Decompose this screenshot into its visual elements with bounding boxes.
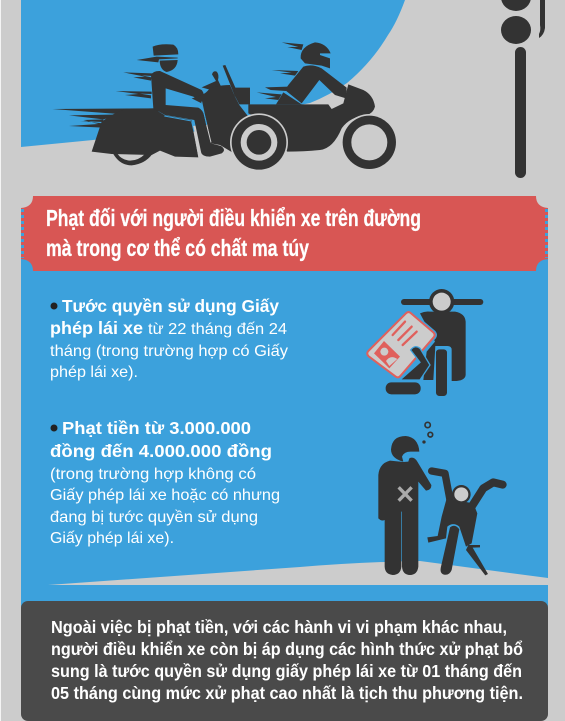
rear half of motorcycle and rider <box>52 44 224 165</box>
background: blue sky shape <box>21 0 405 147</box>
heading text <box>46 205 421 261</box>
engine block <box>192 85 272 155</box>
icon: intoxicated figures <box>378 422 503 575</box>
icon: traffic light <box>501 0 545 178</box>
rear rider torso and leg <box>151 71 224 157</box>
text block: note: Ngoài việc bị phạt tiền, với các hành vi vi phạm khác nhau, <box>51 617 507 637</box>
text block: fine: (trong trường hợp không có <box>50 466 256 483</box>
text block: license suspension <box>50 296 288 381</box>
text block: license suspension: phép lái xe). <box>50 364 138 381</box>
text block: license suspension: từ 22 tháng đến 24 <box>148 321 287 338</box>
front wheel <box>341 114 398 171</box>
falling person <box>432 471 450 500</box>
rear wheel <box>230 113 288 171</box>
text block: license suspension: tháng (trong trường hợp có Giấy <box>50 343 288 360</box>
text block: license suspension: phép lái xe <box>50 318 143 338</box>
heading text: Phạt đối với người điều khiển xe trên đường <box>46 205 421 231</box>
heading banner <box>21 196 548 271</box>
icon: motorbike with license card <box>367 289 483 396</box>
text block: fine: Phạt tiền từ 3.000.000 <box>62 418 251 438</box>
front half of motorcycle and rider <box>192 42 398 171</box>
rear rider hat and head <box>137 44 178 72</box>
text block: fine: Giấy phép lái xe hoặc có nhưng <box>50 487 280 504</box>
thought bubbles <box>425 422 430 428</box>
text block: note: người điều khiển xe còn bị áp dụng các hình thức xử phạt bổ <box>51 639 523 659</box>
panel: note box <box>21 601 548 721</box>
road divider <box>48 561 548 585</box>
text block: fine: Giấy phép lái xe). <box>50 530 174 547</box>
rear luggage <box>92 108 198 157</box>
speed lines <box>116 72 152 98</box>
text block: note <box>51 617 523 703</box>
text block: license suspension: Tước quyền sử dụng Giấy <box>62 296 279 316</box>
motorcycle body <box>248 84 375 152</box>
text block: note: 05 tháng cùng mức xử phạt cao nhất là tịch thu phương tiện. <box>51 683 523 703</box>
license card <box>367 312 435 377</box>
front rider <box>301 42 331 68</box>
mirror, handlebar and windshield <box>202 65 239 97</box>
text block: fine <box>50 418 280 547</box>
text block: note: sung là tước quyền sử dụng giấy phép lái xe từ 01 tháng đến <box>51 661 522 681</box>
text block: fine: đang bị tước quyền sử dụng <box>50 509 258 526</box>
standing person <box>391 436 419 462</box>
heading text: mà trong cơ thể có chất ma túy <box>46 235 309 261</box>
panel: blue content area <box>21 240 548 610</box>
text block: fine: đồng đến 4.000.000 đồng <box>50 441 272 461</box>
illustration: motorcycle with riders <box>52 42 398 171</box>
